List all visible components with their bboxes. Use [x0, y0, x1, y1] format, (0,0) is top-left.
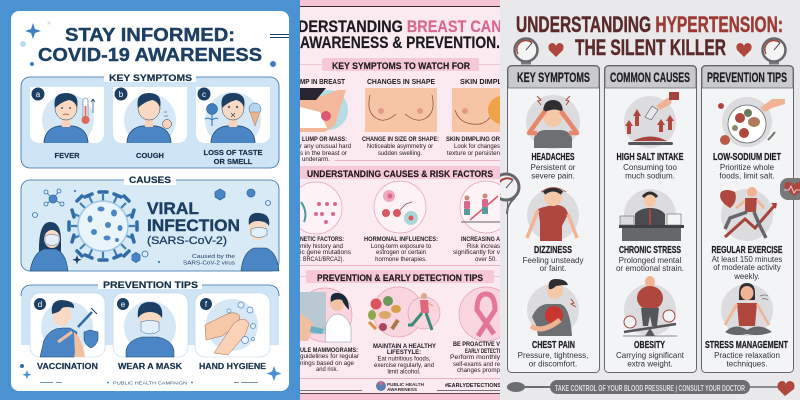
risk: genetic factors: mily history and: [300, 244, 343, 250]
symptom: fever: FEVER: [54, 151, 80, 160]
tip: be proactive: self-exams and re: [453, 362, 501, 368]
tip: schedule mammograms: [298, 288, 359, 373]
symptom: fever: a: [36, 90, 41, 99]
footer: public health campaign: [20, 364, 282, 386]
item: dizziness: Feeling unsteady: [523, 256, 583, 265]
symptom: skin dimpling: [446, 79, 500, 156]
tip: healthy lifestyle: limit alcohol.: [387, 370, 421, 376]
icon: pink ribbon: [477, 294, 495, 336]
text: viral infection: VIRAL: [147, 199, 199, 218]
tip: schedule mammograms: ULE MAMMOGRAMS:: [300, 348, 358, 354]
footer: public health awareness: [300, 378, 500, 391]
section: key symptoms to watch for: [300, 58, 516, 163]
symptom: lump in breast: [300, 79, 351, 163]
tip: be proactive: changes promp: [457, 368, 501, 374]
section: causes and risk factors: [290, 166, 512, 266]
item: obesity: extra weight.: [627, 360, 673, 368]
item: stress management: techniques.: [727, 360, 767, 368]
risk: hormonal influences: HORMONAL INFLUENCES:: [364, 237, 438, 243]
title: THE SILENT KILLER: [575, 35, 726, 60]
tip: schedule mammograms: and risk.: [316, 367, 338, 373]
symptom: cough: COUGH: [136, 151, 164, 160]
column: common causes: [604, 66, 696, 372]
heading: causes: CAUSES: [129, 175, 171, 186]
risk: increasing age: INCREASING A: [461, 237, 501, 243]
item: low-sodium diet: Prioritize whole: [720, 163, 775, 172]
item: stress management: Practice relaxation: [714, 351, 780, 360]
risk: hormonal influences: hormone therapies.: [375, 257, 427, 263]
panel: prevention tips: [21, 279, 279, 371]
item: dizziness: DIZZINESS: [534, 245, 572, 256]
tip: hand hygiene: HAND HYGIENE: [199, 362, 267, 371]
symptom: fever: [30, 87, 104, 160]
title: UNDERSTANDING BREAST CANCER:: [277, 18, 537, 36]
footer: public health awareness: AWARENESS: [387, 387, 418, 393]
symptom: loss of taste or smell: [196, 87, 270, 166]
tip: vaccination: d: [38, 300, 42, 309]
icon: gauge right: [762, 38, 786, 64]
item: regular exercise: of moderate activity: [713, 263, 781, 272]
tip: wear a mask: e: [121, 300, 126, 309]
symptom: cough: [113, 87, 187, 160]
symptom: loss of taste or smell: OR SMELL: [214, 157, 253, 166]
symptom: loss of taste or smell: LOSS OF TASTE: [203, 148, 263, 157]
risk: genetic factors: [300, 182, 351, 262]
section: prevention and early detection: [298, 270, 513, 376]
icon: footer heart: [778, 381, 794, 396]
symptom: changes in shape: CHANGE IN SIZE OR SHAPE:: [362, 137, 439, 143]
tip: be proactive: EARLY DETECTI: [465, 349, 500, 355]
heading: prevention tips: PREVENTION TIPS: [103, 280, 198, 291]
heading: KEY SYMPTOMS: [517, 69, 590, 85]
tip: hand hygiene: [195, 293, 270, 371]
decorative sparkles: [20, 22, 289, 67]
item: headaches: [526, 95, 580, 180]
item: headaches: Persistent or: [531, 163, 576, 172]
tip: healthy lifestyle: exercise regularly, and: [374, 363, 434, 369]
symptom: skin dimpling: texture or persisten: [447, 151, 500, 157]
risk: increasing age: significantly for v: [453, 250, 500, 256]
icon: side heart monitor: [780, 178, 800, 200]
risk: hormonal influences: [364, 181, 438, 263]
item: low-sodium diet: [713, 97, 785, 180]
footer banner: [507, 380, 794, 396]
title: STAY INFORMED:: [65, 24, 235, 45]
text: viral infection: INFECTION: [147, 216, 240, 235]
column: key symptoms: [508, 66, 600, 372]
item: dizziness: or faint.: [540, 264, 566, 273]
symptom: lump in breast: LUMP OR MASS:: [302, 137, 347, 143]
symptom: lump in breast: s in the breast or: [300, 151, 347, 157]
heading: PREVENTION & EARLY DETECTION TIPS: [317, 273, 483, 283]
item: high salt intake: HIGH SALT INTAKE: [616, 152, 684, 163]
risk: genetic factors: NETIC FACTORS:: [300, 237, 344, 243]
illustration: masked woman: [30, 222, 68, 271]
tip: wear a mask: WEAR A MASK: [118, 362, 182, 371]
text: viral infection: Caused by the: [192, 254, 235, 260]
tip: schedule mammograms: guidelines for regular: [300, 354, 359, 360]
title: [516, 12, 783, 60]
footer: public health awareness: PUBLIC HEALTH: [387, 382, 425, 388]
item: chronic stress: [616, 189, 684, 273]
symptom: skin dimpling: Look for changes: [454, 144, 500, 150]
title: [300, 20, 500, 48]
item: regular exercise: weekly.: [733, 272, 760, 281]
tip: be proactive: Perform monthly: [450, 355, 500, 361]
item: high salt intake: much sodium.: [625, 172, 675, 180]
item: chest pain: [518, 279, 588, 368]
tip: healthy lifestyle: Eat nutritious foods,: [377, 356, 431, 362]
symptom: changes in shape: [362, 79, 439, 157]
item: high salt intake: [616, 92, 684, 180]
symptom: cough: b: [119, 90, 124, 99]
risk: increasing age: over 50.: [475, 257, 497, 263]
tip: healthy lifestyle: [368, 287, 440, 376]
symptom: lump in breast: MP IN BREAST: [300, 79, 346, 86]
heading: KEY SYMPTOMS TO WATCH FOR: [332, 61, 470, 71]
item: obesity: OBESITY: [634, 340, 665, 351]
risk: increasing age: Risk increas: [467, 244, 500, 250]
illustration: masked man: [241, 213, 279, 271]
item: chronic stress: or emotional strain.: [616, 264, 684, 273]
heading: COMMON CAUSES: [610, 69, 690, 85]
symptom: lump in breast: r any unusual hard: [300, 144, 351, 150]
panel: COVID-19 awareness poster: [0, 0, 300, 400]
panel: key symptoms: [21, 72, 279, 168]
item: headaches: HEADACHES: [532, 152, 575, 163]
text: viral infection: SARS-CoV-2 virus: [183, 260, 235, 266]
symptom: changes in shape: CHANGES IN SHAPE: [367, 79, 435, 86]
icon: heart left: [548, 43, 564, 57]
item: dizziness: [523, 188, 583, 273]
heading: UNDERSTANDING CAUSES & RISK FACTORS: [307, 169, 493, 179]
item: stress management: [705, 283, 788, 368]
tip: vaccination: [30, 293, 105, 371]
text: viral infection: (SARS-CoV-2): [147, 235, 227, 247]
icon: virus: [69, 192, 137, 260]
symptom: skin dimpling: SKIN DIMPLING OR: [446, 137, 501, 143]
symptom: skin dimpling: SKIN DIMPL: [460, 79, 503, 86]
title: [38, 28, 262, 62]
footer: public health campaign: PUBLIC HEALTH CAMPAIGN: [113, 380, 188, 386]
item: headaches: severe pain.: [531, 172, 575, 180]
item: obesity: Carrying significant: [616, 351, 685, 360]
item: obesity: [616, 276, 685, 368]
column: prevention tips: [702, 66, 794, 372]
item: high salt intake: Consuming too: [623, 163, 677, 172]
text: viral infection: [147, 199, 240, 266]
item: chronic stress: Prolonged mental: [619, 256, 682, 265]
tip: healthy lifestyle: LIFESTYLE:: [387, 350, 421, 356]
risk: hormonal influences: estrogen or certain: [376, 250, 426, 256]
panel: breast cancer awareness poster: [300, 0, 500, 400]
risk: hormonal influences: Long-term exposure to: [371, 244, 432, 250]
icon: gauge left: [514, 38, 538, 64]
risk: genetic factors: ic gene mutations: [300, 250, 351, 256]
symptom: changes in shape: sudden swelling.: [378, 151, 423, 157]
tip: schedule mammograms: nings based on age: [300, 361, 355, 367]
symptom: lump in breast: underarm.: [302, 157, 330, 163]
tip: be proactive: BE PROACTIVE V: [453, 342, 500, 348]
icon: heart right: [736, 43, 752, 57]
heading: key symptoms: KEY SYMPTOMS: [109, 73, 192, 84]
item: regular exercise: [712, 187, 783, 281]
item: regular exercise: At least 150 minutes: [712, 255, 782, 264]
item: chronic stress: CHRONIC STRESS: [619, 245, 681, 256]
title: AWARENESS & PREVENTION.: [300, 34, 500, 52]
footer: public health awareness: #EARLYDETECTIONSA: [445, 383, 505, 389]
item: chest pain: or discomfort.: [529, 360, 577, 368]
panel: causes: [21, 175, 279, 271]
title: COVID-19 AWARENESS: [38, 44, 262, 65]
tip: be proactive: [450, 286, 500, 374]
tip: hand hygiene: f: [205, 300, 208, 309]
item: chest pain: CHEST PAIN: [532, 340, 575, 351]
item: chest pain: Pressure, tightness,: [518, 351, 588, 360]
icon: side gauge: [493, 174, 519, 214]
risk: genetic factors: : BRCA1/BRCA2).: [300, 257, 344, 263]
panel: hypertension poster: [493, 0, 800, 400]
item: low-sodium diet: foods, limit salt.: [719, 172, 775, 180]
tip: vaccination: VACCINATION: [37, 362, 98, 371]
tip: wear a mask: [113, 293, 188, 371]
tip: healthy lifestyle: MAINTAIN A HEALTHY: [373, 344, 436, 350]
icon: molecules: [32, 189, 270, 264]
symptom: changes in shape: Noticeable asymmetry or: [367, 144, 433, 150]
symptom: loss of taste or smell: c: [202, 90, 206, 99]
risk: increasing age: [453, 180, 500, 261]
